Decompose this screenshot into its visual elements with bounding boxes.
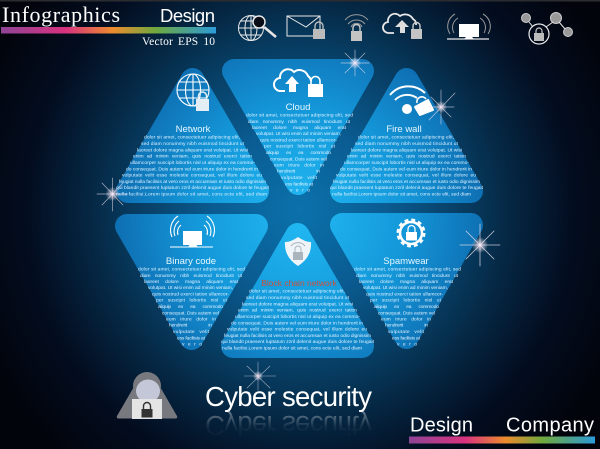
label: Binary code [166, 256, 216, 267]
body text: ullamcorper suscipit lobortis nisl ut aliquip ex ea commo- [130, 160, 255, 166]
body text [330, 134, 484, 197]
body text [116, 134, 270, 197]
label: Block chain network [261, 278, 338, 288]
body text: laoreet dolore magna aliquam erat [144, 279, 239, 285]
panel: Fire wall [330, 80, 484, 197]
body text: v e r o [182, 342, 202, 348]
body text: aliquip ex ea commodo [266, 150, 331, 156]
body text: hendrerit in [169, 323, 212, 329]
body text: laoreet dolore magna aliquam erat volutpat. Ut wisi [242, 301, 353, 307]
body text: dolor sit amet, consectetuer adipiscing elit, [358, 134, 454, 140]
body text: vulputate velit esse molestie consequat, vel illum dolore eu [122, 172, 262, 178]
panel: Block chain network [221, 235, 375, 351]
star: bottom [244, 362, 276, 390]
label: Spamwear [383, 256, 429, 267]
body text: enim ad minim veniam, quis nostrud exerci tation [347, 154, 466, 160]
body text: eum iriure dolor in [274, 162, 324, 168]
body text: dolor sit amet, consectetuer adipiscing elit, sed [246, 112, 353, 118]
body text: eum iriure dolor in [166, 316, 216, 322]
icon: network lock [522, 12, 572, 44]
footer: Design Company [409, 414, 595, 444]
body text: laoreet dolore magna aliquam erat volutpat. Ut wisi [137, 147, 248, 153]
body text: ullamcorper suscipit lobortis nisl ut aliquip ex ea commo- [344, 160, 469, 166]
body text: laoreet dolore magna aliquam erat [359, 279, 454, 285]
label: Company: Company [506, 414, 594, 436]
panel: Cloud [234, 69, 362, 194]
rainbow bar [409, 436, 595, 444]
title: Cyber security: Cyber security [205, 381, 372, 412]
icon: monitor wifi [447, 14, 490, 39]
body text: per suscipit lobortis nisl ut [370, 298, 442, 304]
body text: eum iriure dolor in [381, 316, 431, 322]
body text: ess facilisis at [392, 335, 421, 341]
body text: diam nonummy nibh euismod tincidunt ut [248, 119, 351, 125]
body text: diam nonummy nibh euismod tincidunt ut [356, 273, 459, 279]
header: Infographics Design [1, 2, 216, 48]
body text: qui blandit praesent luptatum zzril delenit augue duis dolore te feugait [221, 339, 375, 345]
icon: shield with lock [285, 237, 311, 266]
heading: Design: Design [160, 5, 215, 26]
rainbow bar [1, 27, 216, 34]
body text [221, 288, 375, 351]
body text: feugiat nulla facilisis at vero eros et accumsan et iusto odio dignissim [119, 179, 266, 185]
star: top [341, 50, 369, 76]
body text: consequat. Duis autem vel [270, 156, 327, 162]
body text: do consequat. Duis autem vel eum iriure dolor in hendrerit in [231, 320, 363, 326]
body text: volutpat. Ut wisi enim ad minim veniam, [363, 285, 448, 291]
sparkle stars [97, 50, 500, 390]
icon: mail lock [287, 16, 325, 39]
body text: per suscipit lobortis nisl ut [264, 144, 336, 150]
body text: aliquip ex ea commodo [374, 304, 439, 310]
icon: cloud upload lock [383, 14, 422, 39]
body text: vulputate velit esse molestie consequat, vel illum dolore eu [227, 326, 367, 332]
body text: do consequat. Duis autem vel eum iriure dolor in hendrerit in [340, 166, 472, 172]
body text: ess facilisis at [285, 181, 314, 187]
body text: volutpat. Ut wisi enim ad minim veniam, [148, 285, 233, 291]
body text [246, 112, 353, 194]
body text: vulputate velit [173, 329, 210, 335]
body text: laoreet dolore magna aliquam erat [252, 125, 347, 131]
panel: Spamwear [342, 220, 471, 348]
body text: nulla facilisi.Lorem ipsum dolor sit amet, cons ecte elit, sed diam [116, 191, 267, 197]
body text: consequat. Duis autem vel [378, 310, 435, 316]
icon: globe search [238, 16, 276, 40]
label: Network [176, 124, 211, 135]
body text: ullamcorper suscipit lobortis nisl ut aliquip ex ea commo- [235, 314, 360, 320]
body text: enim ad minim veniam, quis nostrud exerci tation [238, 308, 357, 314]
body text: volutpat. Ut wisi enim ad minim veniam, [256, 131, 341, 137]
body text: sed diam nonummy nibh euismod tincidunt ut [246, 295, 350, 301]
icon row [238, 12, 572, 44]
star: left [97, 178, 128, 211]
body text: nulla facilisi.Lorem ipsum dolor sit amet, cons ecte elit, sed diam [332, 191, 471, 197]
icon: gear with lock [398, 220, 424, 246]
body text: dolor sit amet, consectetuer adipiscing elit, [249, 288, 345, 294]
body text: per suscipit lobortis nisl ut [156, 298, 228, 304]
body text: sed diam nonummy nibh euismod tincidunt ut [355, 141, 459, 147]
panel: Network [116, 74, 270, 197]
icon: monitor with signal [170, 216, 214, 247]
body text: dolor sit amet, consectetuer adipiscing elit, sed [354, 266, 461, 272]
body text: enim ad minim veniam, quis nostrud exerci tation [133, 154, 252, 160]
icon: wifi with padlock [390, 86, 433, 115]
title reflection: Cyber security [205, 410, 372, 441]
body text: do consequat. Duis autem vel eum iriure dolor in hendrerit in [126, 166, 258, 172]
body text: diam nonummy nibh euismod tincidunt ut [140, 273, 243, 279]
body text: vulputate velit [281, 175, 318, 181]
body text: quis nostrud exerci tation ullamcor- [260, 138, 337, 144]
star: right [460, 224, 500, 266]
star: fire wall [428, 90, 455, 124]
body text: feugiat nulla facilisis at vero eros et accumsan et iusto odio dignissim [224, 333, 371, 339]
body text: dolor sit amet, consectetuer adipiscing elit, sed [138, 266, 245, 272]
body text: vulputate velit [388, 329, 425, 335]
icon: wifi lock [345, 15, 368, 41]
panel: Binary code [127, 216, 256, 348]
label: Fire wall [386, 124, 422, 135]
body text: qui blandit praesent luptatum zzril delenit augue duis dolore te feugait [330, 185, 484, 191]
heading: Infographics: Infographics [2, 2, 120, 27]
body text: qui blandit praesent luptatum zzril delenit augue duis dolore te feugait [116, 185, 270, 191]
body text: feugiat nulla facilisis at vero eros et accumsan et iusto odio dignissim [333, 179, 480, 185]
body text: vulputate velit esse molestie consequat, vel illum dolore eu [336, 172, 476, 178]
icon: cloud with lock [274, 69, 323, 97]
body text: v e r o [290, 188, 310, 194]
body text: sed diam nonummy nibh euismod tincidunt ut [141, 141, 245, 147]
body text: nulla facilisi.Lorem ipsum dolor sit amet, cons ecte elit, sed diam [222, 345, 362, 351]
body text [354, 266, 461, 348]
body text: v e r o [397, 342, 417, 348]
label: Cloud [286, 102, 310, 113]
body text: ess facilisis at [177, 335, 206, 341]
body text: laoreet dolore magna aliquam erat volutpat. Ut wisi [351, 147, 462, 153]
body text: dolor sit amet, consectetuer adipiscing elit, [144, 134, 240, 140]
body text [138, 266, 245, 348]
body text: hendrerit in [385, 323, 428, 329]
body text: quis nostrud exerci tation ullamcor- [366, 292, 443, 298]
body text: quis nostrud exerci tation ullamcor- [152, 292, 229, 298]
icon: globe with lock [177, 74, 209, 111]
label: Design: Design [410, 414, 473, 436]
body text: hendrerit in [277, 169, 320, 175]
icon: hacker with laptop [117, 372, 177, 419]
subtitle: Vector EPS 10 [142, 36, 215, 48]
body text: aliquip ex ea commodo [158, 304, 223, 310]
body text: consequat. Duis autem vel [162, 310, 219, 316]
